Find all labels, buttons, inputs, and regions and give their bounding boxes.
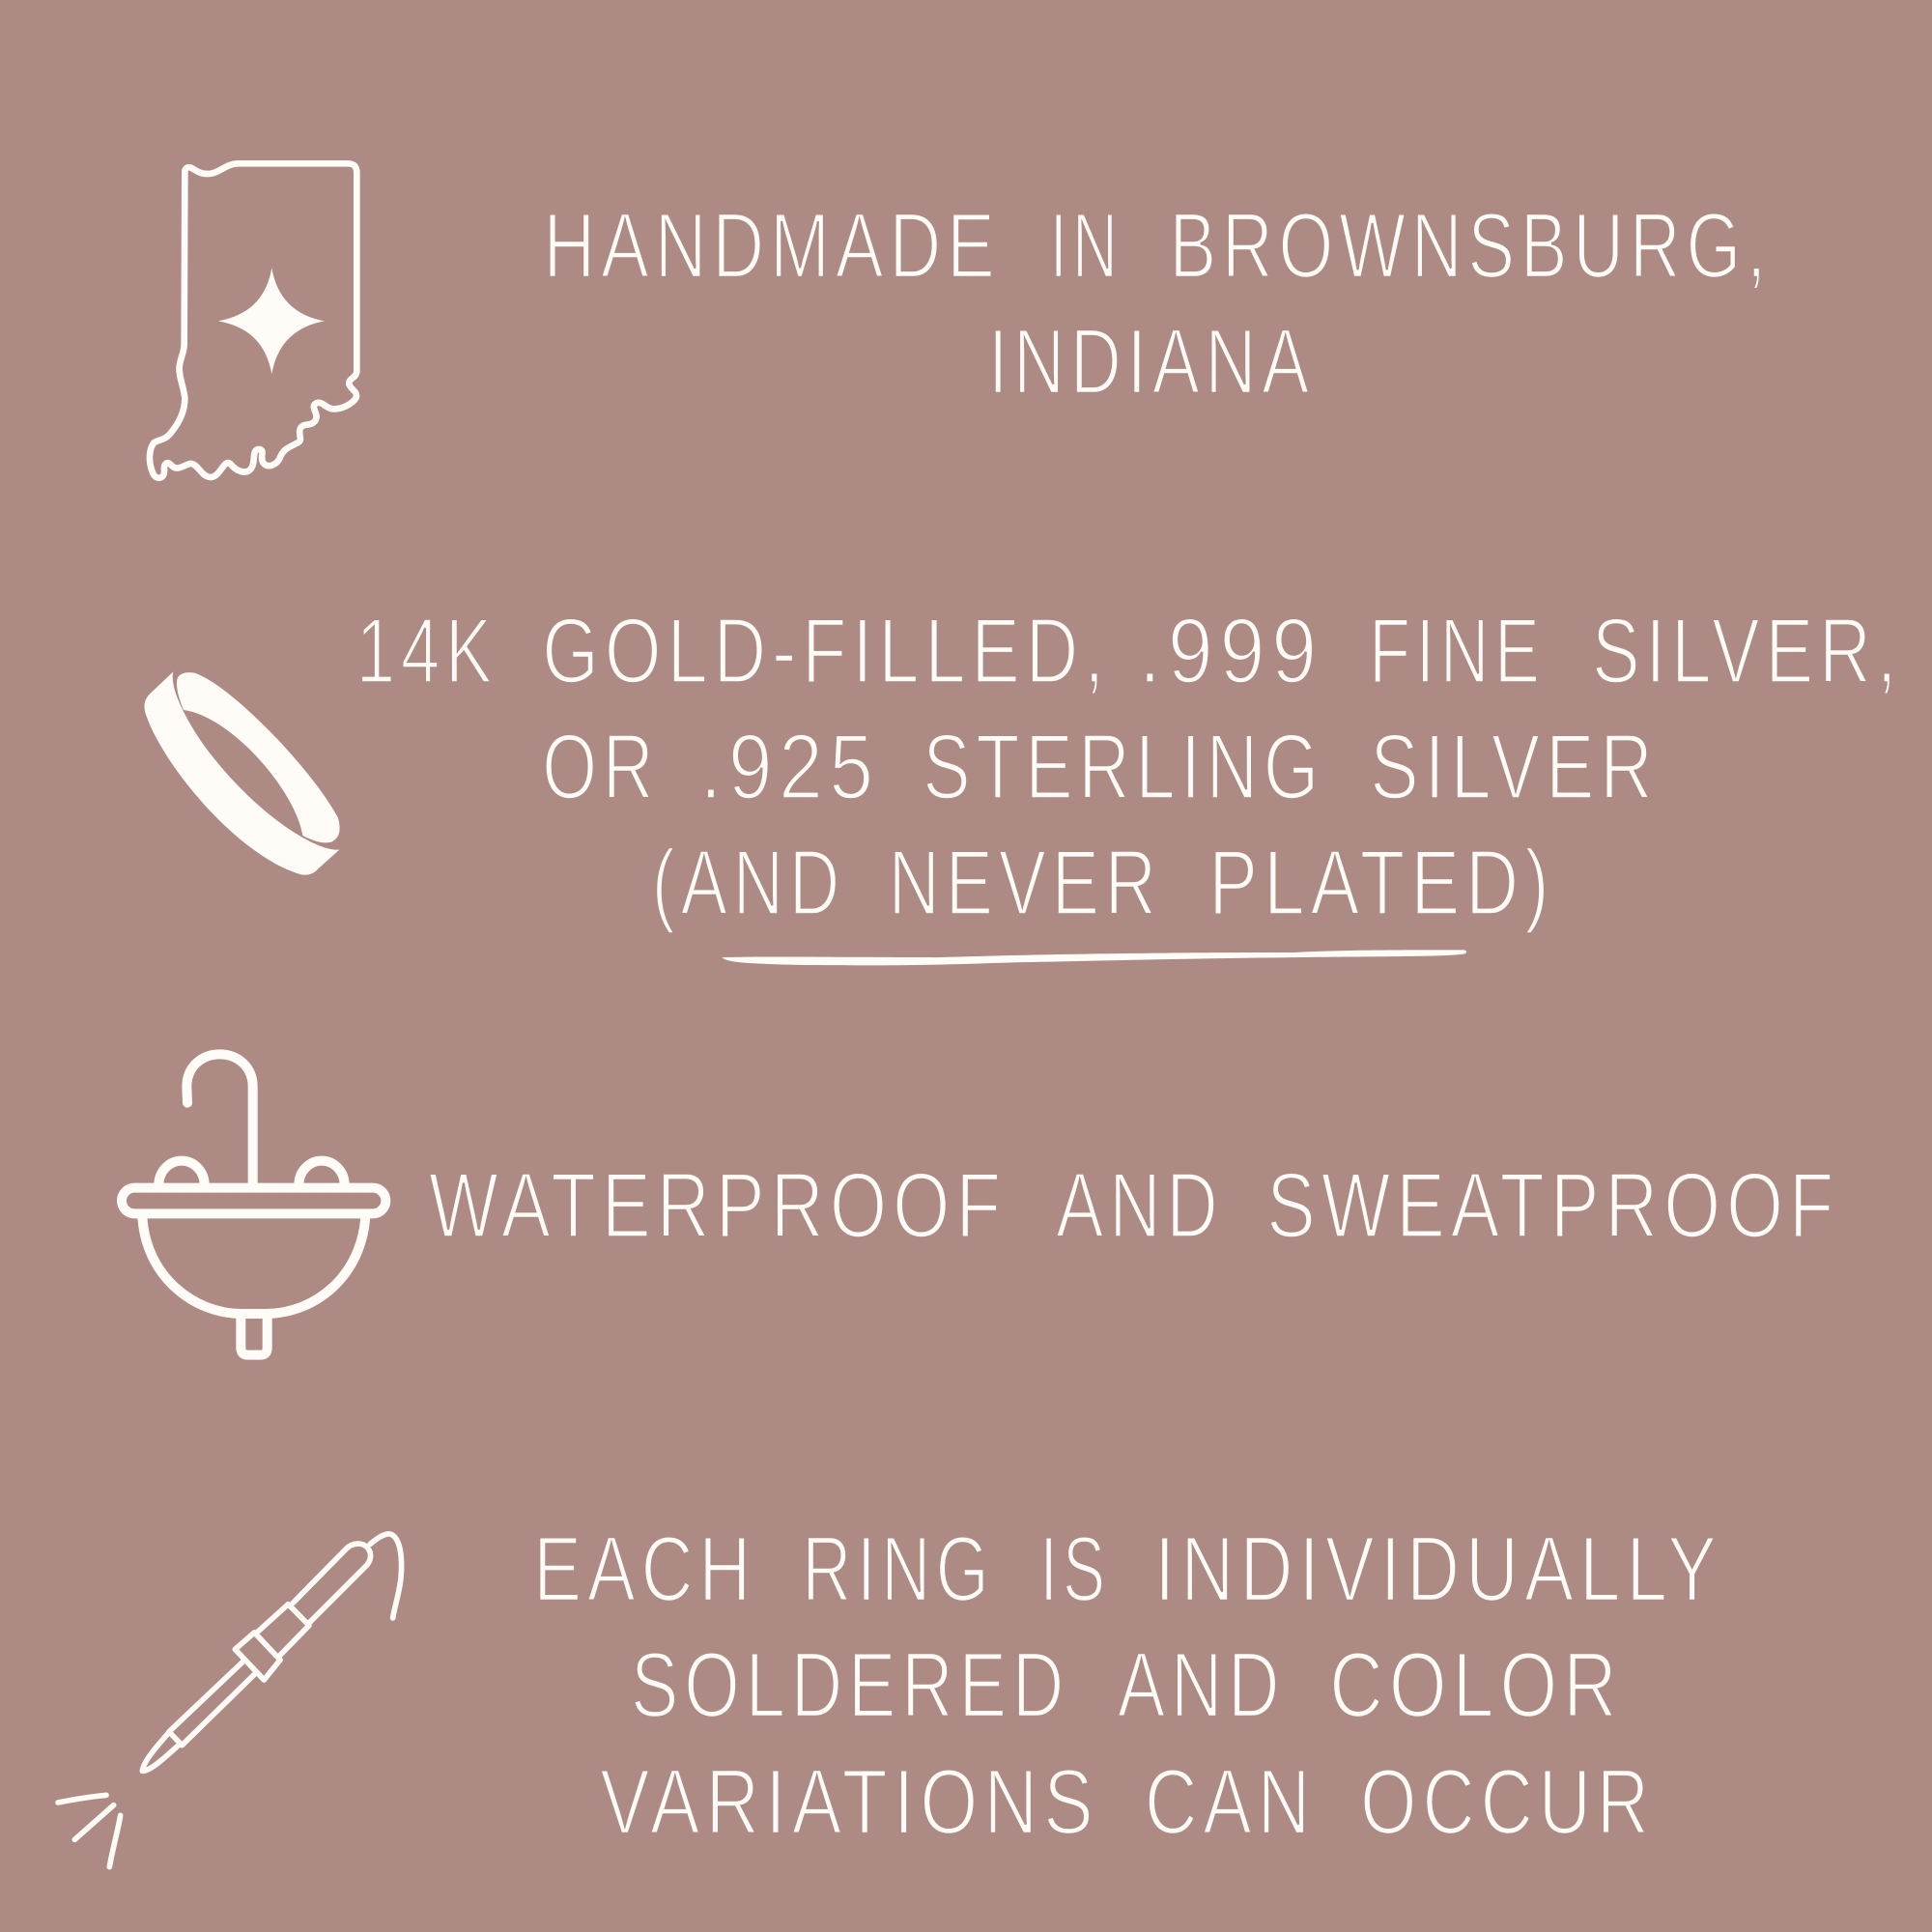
- text: waterproof: AND: [1056, 1154, 1224, 1258]
- hand-drawn underline: [722, 950, 1466, 965]
- text: waterproof: [429, 1154, 1839, 1258]
- text: metals: (AND: [652, 831, 845, 934]
- text: handmade in Brownsburg: [543, 194, 1772, 413]
- text: metals: [356, 600, 1902, 934]
- text: each ring soldered: [533, 1518, 1722, 1854]
- text: each ring soldered: OCCUR: [1360, 1750, 1655, 1854]
- text: each ring soldered: INDIVIDUALLY: [1154, 1518, 1722, 1621]
- text: metals: PLATED): [1208, 831, 1555, 934]
- text: metals: 14K: [356, 600, 497, 703]
- text: each ring soldered: CAN: [1145, 1750, 1316, 1854]
- text: metals: FINE: [1369, 600, 1545, 703]
- text: metals: STERLING: [923, 716, 1324, 819]
- text: metals: NEVER: [889, 831, 1162, 934]
- text: each ring soldered: RING: [802, 1518, 994, 1621]
- text: metals: GOLD-FILLED,: [542, 600, 1110, 703]
- text: metals: OR: [542, 716, 659, 819]
- text: each ring soldered: EACH: [533, 1518, 756, 1621]
- text: metals: .925: [699, 716, 880, 819]
- text: handmade in Brownsburg: HANDMADE: [543, 194, 1001, 298]
- text: each ring soldered: VARIATIONS: [600, 1750, 1099, 1854]
- text: waterproof: WATERPROOF: [429, 1154, 1007, 1258]
- text: metals: .999: [1139, 600, 1323, 703]
- icon: Indiana outline with star: [150, 163, 356, 478]
- text: each ring soldered: COLOR: [1329, 1634, 1623, 1737]
- icon: sink: [122, 1054, 385, 1355]
- text: handmade in Brownsburg: INDIANA: [988, 310, 1315, 413]
- icon: soldering iron with sparks: [58, 1534, 402, 1867]
- text: each ring soldered: SOLDERED: [631, 1634, 1069, 1737]
- text: each ring soldered: IS: [1040, 1518, 1110, 1621]
- text: each ring soldered: AND: [1118, 1634, 1285, 1737]
- icon: ring: [144, 671, 340, 875]
- text: metals: SILVER: [1370, 716, 1659, 819]
- text: handmade in Brownsburg: IN: [1050, 194, 1122, 298]
